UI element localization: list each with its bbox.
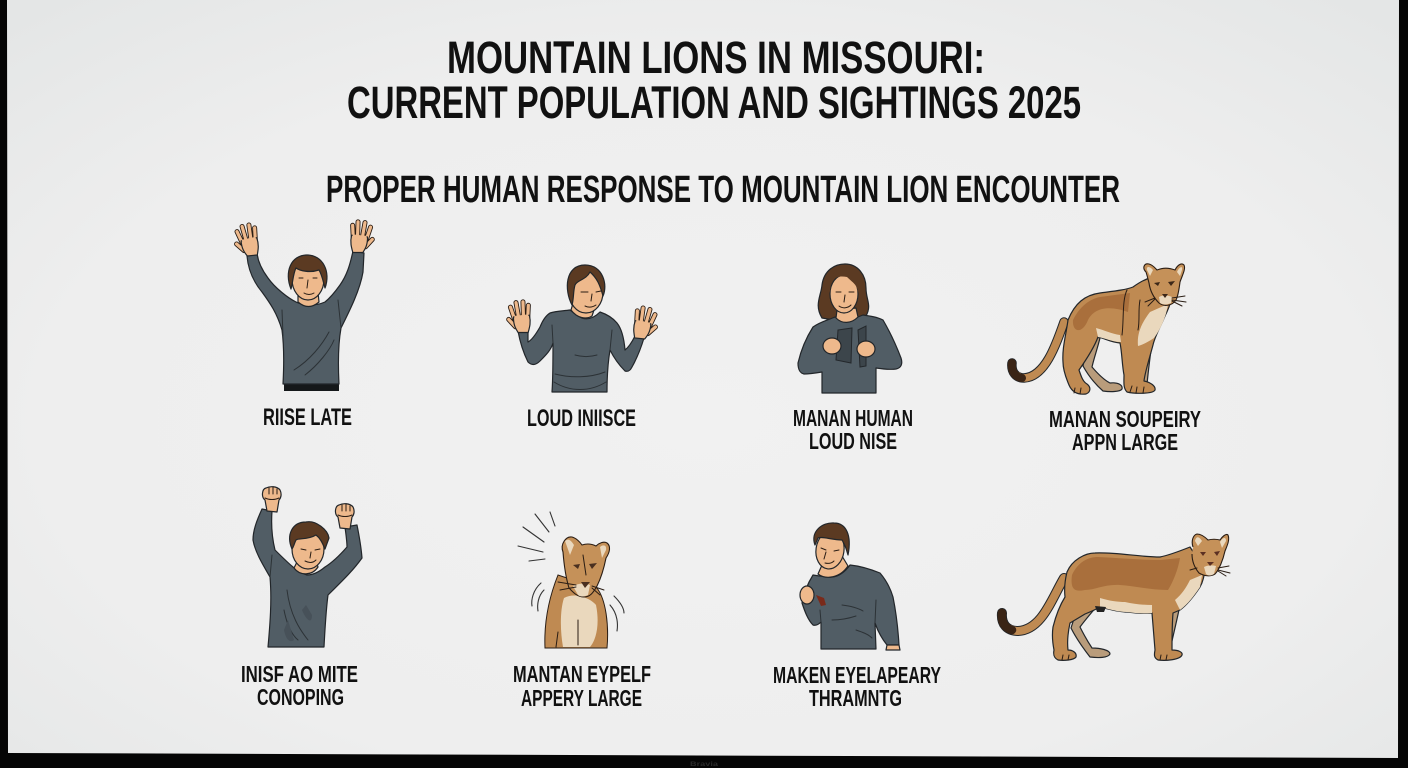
- label: APPERY LARGE: [521, 685, 642, 711]
- label: [513, 661, 651, 711]
- icon: mountain lion standing in profile: [1002, 534, 1230, 660]
- label: LOUD NISE: [809, 428, 897, 454]
- icon: person with binoculars: [798, 264, 902, 393]
- label: [241, 661, 358, 710]
- icon: standing mountain lion: [1012, 264, 1186, 394]
- panel: standing mountain lion facing viewer: [1012, 264, 1201, 455]
- panel: person looking aside: [773, 523, 941, 711]
- icon: person with arms raised: [233, 221, 374, 391]
- label: INISF AO MITE: [241, 661, 358, 687]
- icon: person with open hands: [507, 265, 659, 392]
- label: MANTAN EYPELF: [513, 661, 651, 687]
- title: MOUNTAIN LIONS IN MISSOURI:: [447, 32, 985, 83]
- panel: alert seated mountain lion: [513, 512, 651, 711]
- label: MANAN HUMAN: [793, 405, 913, 431]
- panel: person holding binoculars: [793, 264, 913, 454]
- label: LOUD INIISCE: [527, 405, 636, 432]
- label: [793, 405, 913, 454]
- label: APPN LARGE: [1072, 429, 1178, 455]
- panel: person with open palms: [507, 265, 659, 432]
- panel: mountain lion in profile: [1002, 534, 1230, 660]
- panel: person with fists raised: [241, 487, 362, 710]
- small bezel logo text: Bravia: [690, 762, 719, 768]
- title: CURRENT POPULATION AND SIGHTINGS 2025: [347, 77, 1081, 128]
- label: RIISE LATE: [263, 404, 352, 431]
- label: MAKEN EYELAPEARY: [773, 662, 941, 688]
- label: CONOPING: [257, 684, 344, 710]
- label: THRAMNTG: [809, 685, 902, 711]
- label: MANAN SOUPEIRY: [1049, 406, 1201, 432]
- title: [347, 32, 1081, 128]
- icon: person with raised fists: [253, 487, 362, 647]
- icon: person holding small object: [800, 523, 900, 650]
- label: [1049, 406, 1201, 455]
- label: [773, 662, 941, 711]
- panel: person raising both arms: [233, 221, 374, 431]
- icon: seated mountain lion with motion lines: [518, 512, 624, 648]
